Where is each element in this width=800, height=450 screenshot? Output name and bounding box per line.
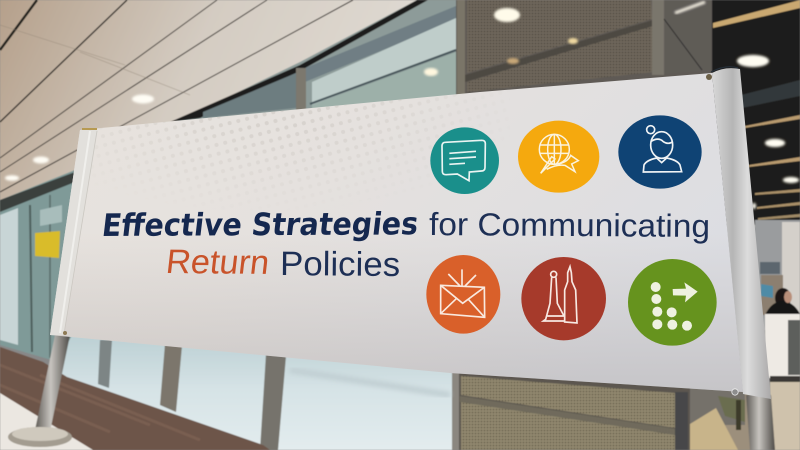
dark ceiling, right xyxy=(712,0,800,243)
ceiling lights xyxy=(5,94,154,181)
icon: person xyxy=(618,115,702,189)
heading line two: Policies xyxy=(280,245,400,284)
glass doors, left xyxy=(0,170,75,362)
banner face xyxy=(50,73,743,392)
banner xyxy=(50,67,771,399)
lower mid: column base and plants xyxy=(685,385,750,450)
icon: envelope with rays xyxy=(426,255,500,334)
receptionist xyxy=(765,288,800,315)
heading line one xyxy=(100,206,710,244)
icon: tower and skyscraper xyxy=(521,257,606,340)
ceiling xyxy=(0,0,470,200)
title xyxy=(100,206,710,284)
icon: speech bubble xyxy=(430,127,499,194)
icon: globe with flag xyxy=(518,121,599,193)
banner right fold xyxy=(711,67,771,399)
upper windows xyxy=(170,0,460,130)
wood floor xyxy=(0,347,270,450)
heading line two: Return xyxy=(164,243,271,282)
grommets xyxy=(63,74,738,395)
lobby: right side xyxy=(755,220,800,450)
column: perforated panels xyxy=(456,0,716,96)
halftone dot pattern xyxy=(128,100,431,174)
icons xyxy=(426,115,717,346)
banner left fold xyxy=(50,129,98,335)
heading line two xyxy=(164,243,400,284)
stanchion pole, right xyxy=(746,395,775,450)
heading line one: for Communicating xyxy=(429,206,710,244)
reception desk xyxy=(765,314,800,378)
icon: dots and arrow xyxy=(628,259,717,346)
heading line one: Effective Strategies xyxy=(100,206,420,244)
white ledge xyxy=(0,393,93,450)
lower perforated panels xyxy=(450,370,690,450)
lower windows xyxy=(60,330,452,450)
stanchion pole, left xyxy=(8,335,72,447)
